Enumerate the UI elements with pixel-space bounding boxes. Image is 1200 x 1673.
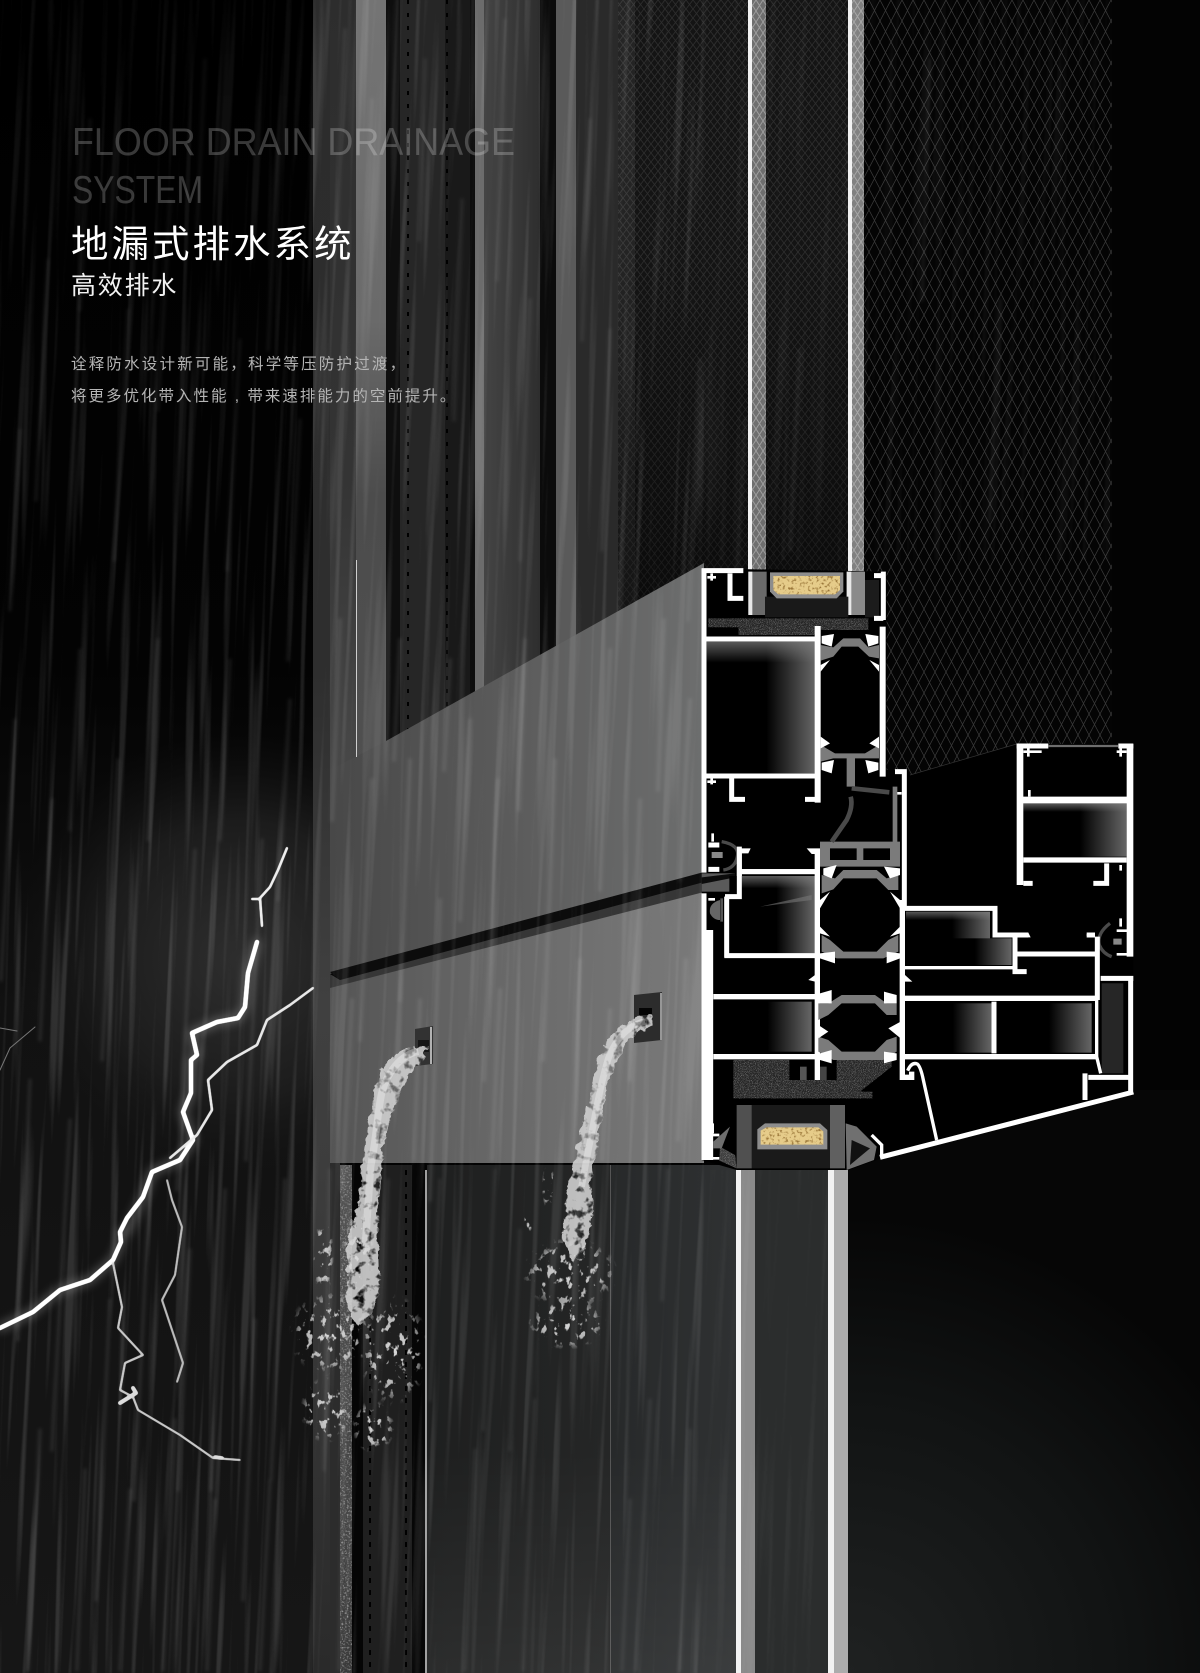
water jets [288,1017,651,1453]
thermal break clips upper [821,634,879,773]
drain outlet plate right [634,992,662,1043]
grey top strip of the right profile [1048,742,1118,749]
bottom gaskets [713,1123,882,1170]
upper cavities with inner glow [707,642,1127,857]
top foam gasket [708,618,868,635]
secondary branch [170,988,313,1158]
water spray right [522,1163,618,1350]
lower part of section [704,847,1133,1170]
water jet left [348,1048,425,1323]
upper bolt tip [252,848,287,926]
lightning bolt [0,848,313,1460]
faint far-left branch [0,1027,35,1070]
body text: 将更多优化带入性能 , 带来速排能力的空前提升。 [71,387,457,405]
lower branches [162,1180,183,1382]
shadow groove entering the section [702,873,735,892]
background: vertical window frame bands [313,0,618,1673]
thermal breaks lower [818,870,898,1060]
lower foam block [733,1060,892,1098]
thermal breaks upper [820,638,900,867]
mesh screen behind the glass [618,0,1112,778]
faint mesh bottom edge [910,744,1017,775]
thermal break clips lower [818,865,901,1063]
bottom glass spacer and gold desiccant [737,1105,845,1168]
subtitle: 高效排水 [71,272,178,300]
aluminium walls upper section [702,568,1133,957]
aluminium walls lower section [704,847,1133,1160]
water jet right [565,1017,651,1257]
title english [72,121,515,212]
section black base [702,568,1133,1170]
title english: FLOOR DRAIN DRAINAGE [72,121,515,164]
thermal break window holes [830,848,890,860]
title chinese: 地漏式排水系统 [71,223,354,265]
small left gasket [710,898,722,922]
main bolt [0,942,257,1328]
speckled seal strips upper [712,788,1122,957]
flags on upper walls [737,848,823,854]
aluminium frame upper panel [330,560,704,974]
aluminium frame lower panel [330,872,704,1163]
body text [71,355,457,405]
drain outlet plate left [415,1026,433,1066]
lower cavities with inner glow [713,876,1123,1073]
glass panes upper [748,0,864,590]
water spray left [288,1210,428,1453]
lower window frames and glass [330,1090,1200,1673]
body text: 诠释防水设计新可能，科学等压防护过渡， [71,355,407,373]
mullion cross-section drawing [702,568,1133,1170]
flags lower [808,933,1093,982]
top glass spacer and gold desiccant [748,572,879,617]
title english: SYSTEM [72,169,203,212]
